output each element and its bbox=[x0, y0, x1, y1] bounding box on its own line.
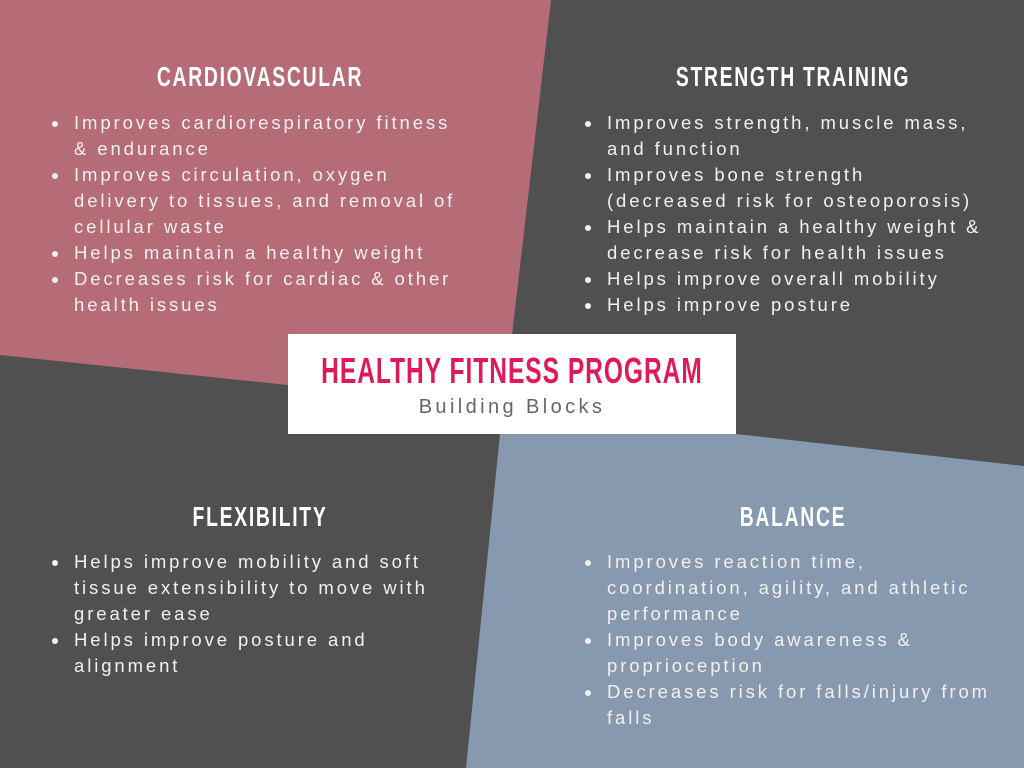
list: flexibility: alignment bbox=[74, 655, 180, 676]
heading: strength training: STRENGTH TRAINING bbox=[676, 61, 910, 92]
list: balance: proprioception bbox=[607, 655, 765, 676]
list: strength training: Helps improve overall mobility bbox=[607, 268, 940, 289]
list: balance: performance bbox=[607, 603, 743, 624]
list: strength training: decrease risk for health issues bbox=[607, 242, 947, 263]
list: strength training: and function bbox=[607, 138, 743, 159]
center title box bbox=[288, 334, 736, 434]
list: strength training: Improves strength, muscle mass, bbox=[607, 112, 968, 133]
heading: balance: BALANCE bbox=[740, 501, 846, 532]
subtitle: Building Blocks bbox=[419, 396, 605, 418]
list: strength training: (decreased risk for osteoporosis) bbox=[607, 190, 972, 211]
list: cardiovascular bbox=[52, 112, 455, 315]
list: cardiovascular: Helps maintain a healthy weight bbox=[74, 242, 425, 263]
list: cardiovascular: cellular waste bbox=[74, 216, 227, 237]
heading: cardiovascular: CARDIOVASCULAR bbox=[157, 61, 363, 92]
list: balance: coordination, agility, and athletic bbox=[607, 577, 970, 598]
list: strength training: Helps maintain a healthy weight & bbox=[607, 216, 981, 237]
title: HEALTHY FITNESS PROGRAM bbox=[321, 350, 703, 391]
list: flexibility: Helps improve posture and bbox=[74, 629, 368, 650]
list: cardiovascular: Improves circulation, oxygen bbox=[74, 164, 390, 185]
list: flexibility bbox=[52, 551, 428, 676]
list: cardiovascular: Decreases risk for cardiac & other bbox=[74, 268, 451, 289]
list: strength training: Improves bone strength bbox=[607, 164, 865, 185]
list: cardiovascular: Improves cardiorespiratory fitness bbox=[74, 112, 450, 133]
list: cardiovascular: health issues bbox=[74, 294, 220, 315]
list: balance: falls bbox=[607, 707, 654, 728]
list: flexibility: tissue extensibility to move with bbox=[74, 577, 428, 598]
list: flexibility: Helps improve mobility and soft bbox=[74, 551, 421, 572]
list: strength training bbox=[585, 112, 981, 315]
list: balance: Decreases risk for falls/injury from bbox=[607, 681, 990, 702]
list: cardiovascular: & endurance bbox=[74, 138, 211, 159]
list: balance: Improves body awareness & bbox=[607, 629, 913, 650]
list: balance bbox=[585, 551, 990, 728]
heading: flexibility: FLEXIBILITY bbox=[193, 501, 327, 532]
list: strength training: Helps improve posture bbox=[607, 294, 853, 315]
list: cardiovascular: delivery to tissues, and removal of bbox=[74, 190, 455, 211]
list: flexibility: greater ease bbox=[74, 603, 213, 624]
list: balance: Improves reaction time, bbox=[607, 551, 866, 572]
